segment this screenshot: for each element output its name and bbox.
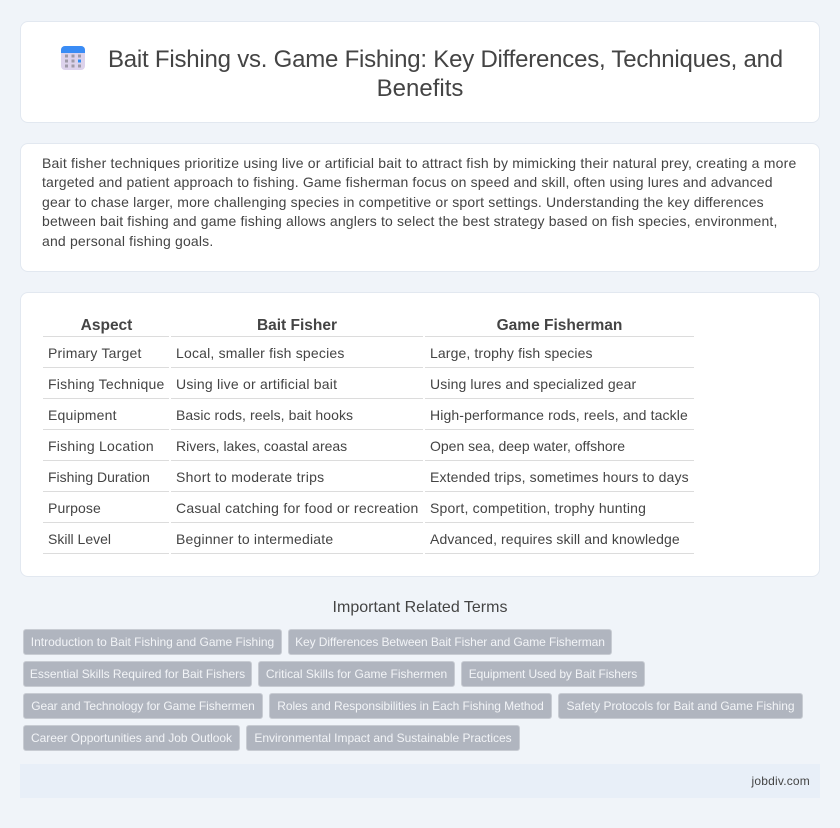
panel: comparison table: Sport, competition, trophy hunting [430,500,646,516]
tags: related terms: Critical Skills for Game Fishermen [266,667,447,681]
tags: related terms: Safety Protocols for Bait and Game Fishing [566,699,794,713]
text block: intro line 4: between bait fishing and game fishing allows anglers to select the best strategy based on fish species, environment, [42,213,778,229]
row: Primary Target: Primary Target [48,345,142,361]
panel: title card [20,21,820,123]
panel: comparison table: Local, smaller fish species [176,345,345,361]
tags: related terms [23,629,803,751]
row: Fishing Location: Fishing Location [48,438,154,454]
panel: comparison table: Basic rods, reels, bait hooks [176,407,353,423]
title line 2: Benefits [377,75,463,102]
text block: intro line 3: gear to chase larger, more challenging species in competitive or sport settings. Understanding the key differences [42,194,764,210]
tags: related terms: Essential Skills Required for Bait Fishers [30,667,245,681]
heading: Important Related Terms: Important Related Terms [333,599,507,616]
row: Skill Level: Skill Level [48,531,111,547]
tags: related terms: Equipment Used by Bait Fishers [469,667,637,681]
tags: related terms: Roles and Responsibilities in Each Fishing Method [277,699,544,713]
panel: comparison table: Casual catching for food or recreation [176,500,419,516]
panel: comparison table: Extended trips, sometimes hours to days [430,469,689,485]
tags: related terms: Introduction to Bait Fishing and Game Fishing [31,635,274,649]
panel: comparison table: Using live or artificial bait [176,376,337,392]
table header: Aspect: Aspect [81,317,132,334]
row: Purpose: Purpose [48,500,101,516]
text block: intro line 2: targeted and patient approach to fishing. Game fisherman focus on speed and skill, often using lures and advanced [42,174,773,190]
text block: intro line 5: and personal fishing goals. [42,233,213,249]
footer [20,764,820,798]
tags: related terms: Key Differences Between Bait Fisher and Game Fisherman [295,635,605,649]
icon: calendar [61,46,85,70]
panel: comparison table: Open sea, deep water, offshore [430,438,625,454]
panel: comparison table: Using lures and specialized gear [430,376,636,392]
tags: related terms: Gear and Technology for Game Fishermen [31,699,255,713]
row: Fishing Technique: Fishing Technique [48,376,165,392]
panel: introduction [20,143,820,272]
panel: comparison table: Advanced, requires skill and knowledge [430,531,680,547]
table header: Bait Fisher: Bait Fisher [257,317,337,334]
text block: intro line 1: Bait fisher techniques prioritize using live or artificial bait to attract fish by mimicking their natural prey, creating a more [42,155,796,171]
panel: comparison table [20,292,820,577]
row: Fishing Duration: Fishing Duration [48,469,150,485]
panel: comparison table: Large, trophy fish species [430,345,593,361]
tags: related terms: Environmental Impact and Sustainable Practices [254,731,512,745]
panel: comparison table: Short to moderate trips [176,469,324,485]
footer text: jobdiv.com: jobdiv.com [752,774,810,788]
table header: Game Fisherman: Game Fisherman [497,317,622,334]
title: Bait Fishing vs. Game Fishing: Key Differences, Techniques, and [108,46,783,73]
panel: comparison table: Rivers, lakes, coastal areas [176,438,347,454]
panel: comparison table: High-performance rods, reels, and tackle [430,407,688,423]
tags: related terms: Career Opportunities and Job Outlook [31,731,232,745]
panel: comparison table: Beginner to intermediate [176,531,333,547]
row: Equipment: Equipment [48,407,117,423]
